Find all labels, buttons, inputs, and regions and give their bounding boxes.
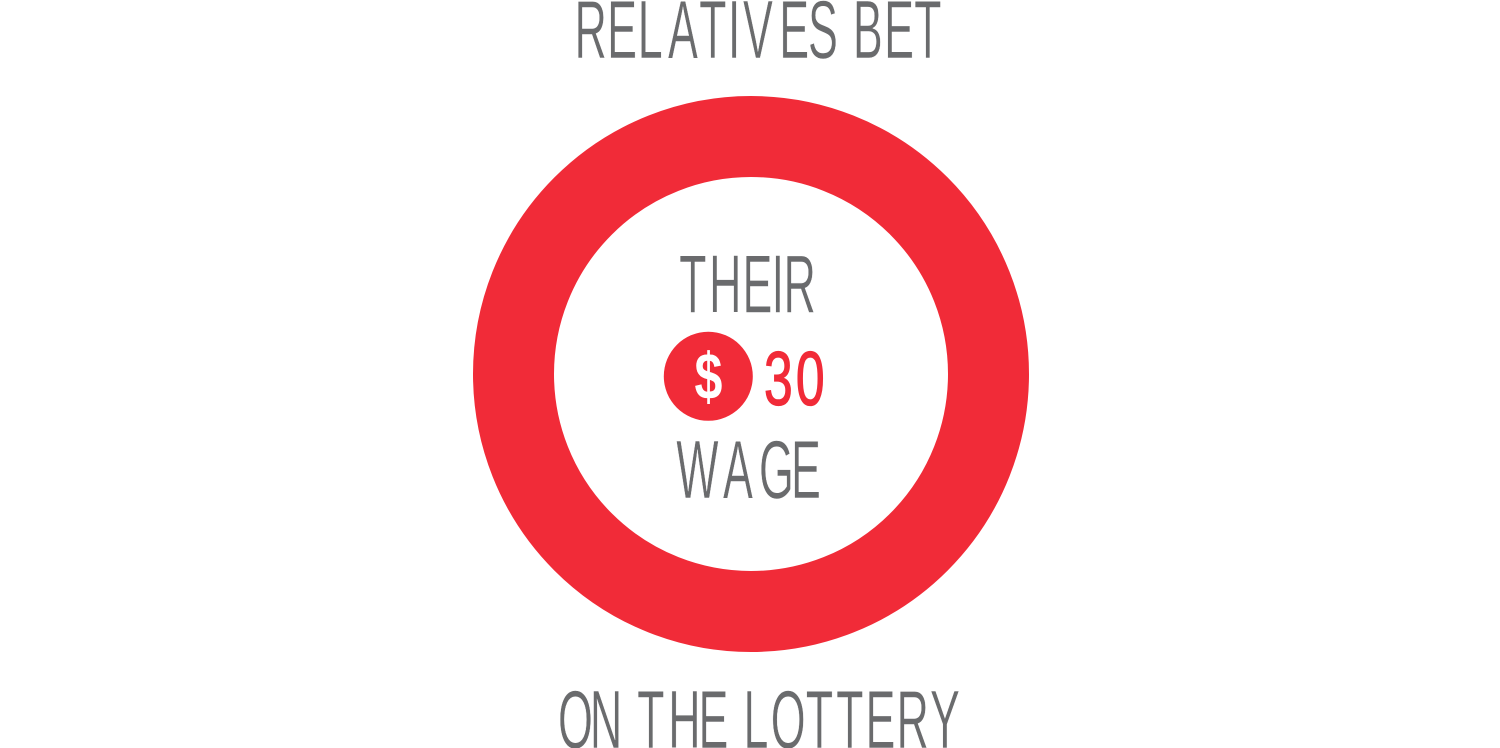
icon: dollar coin: $ [694,340,722,414]
label: their: THEIR [679,239,816,331]
value: 30: 30 [764,336,825,421]
label: wage: WAGE [676,424,821,516]
icon: dollar coin [664,332,753,421]
red ring [514,136,988,612]
